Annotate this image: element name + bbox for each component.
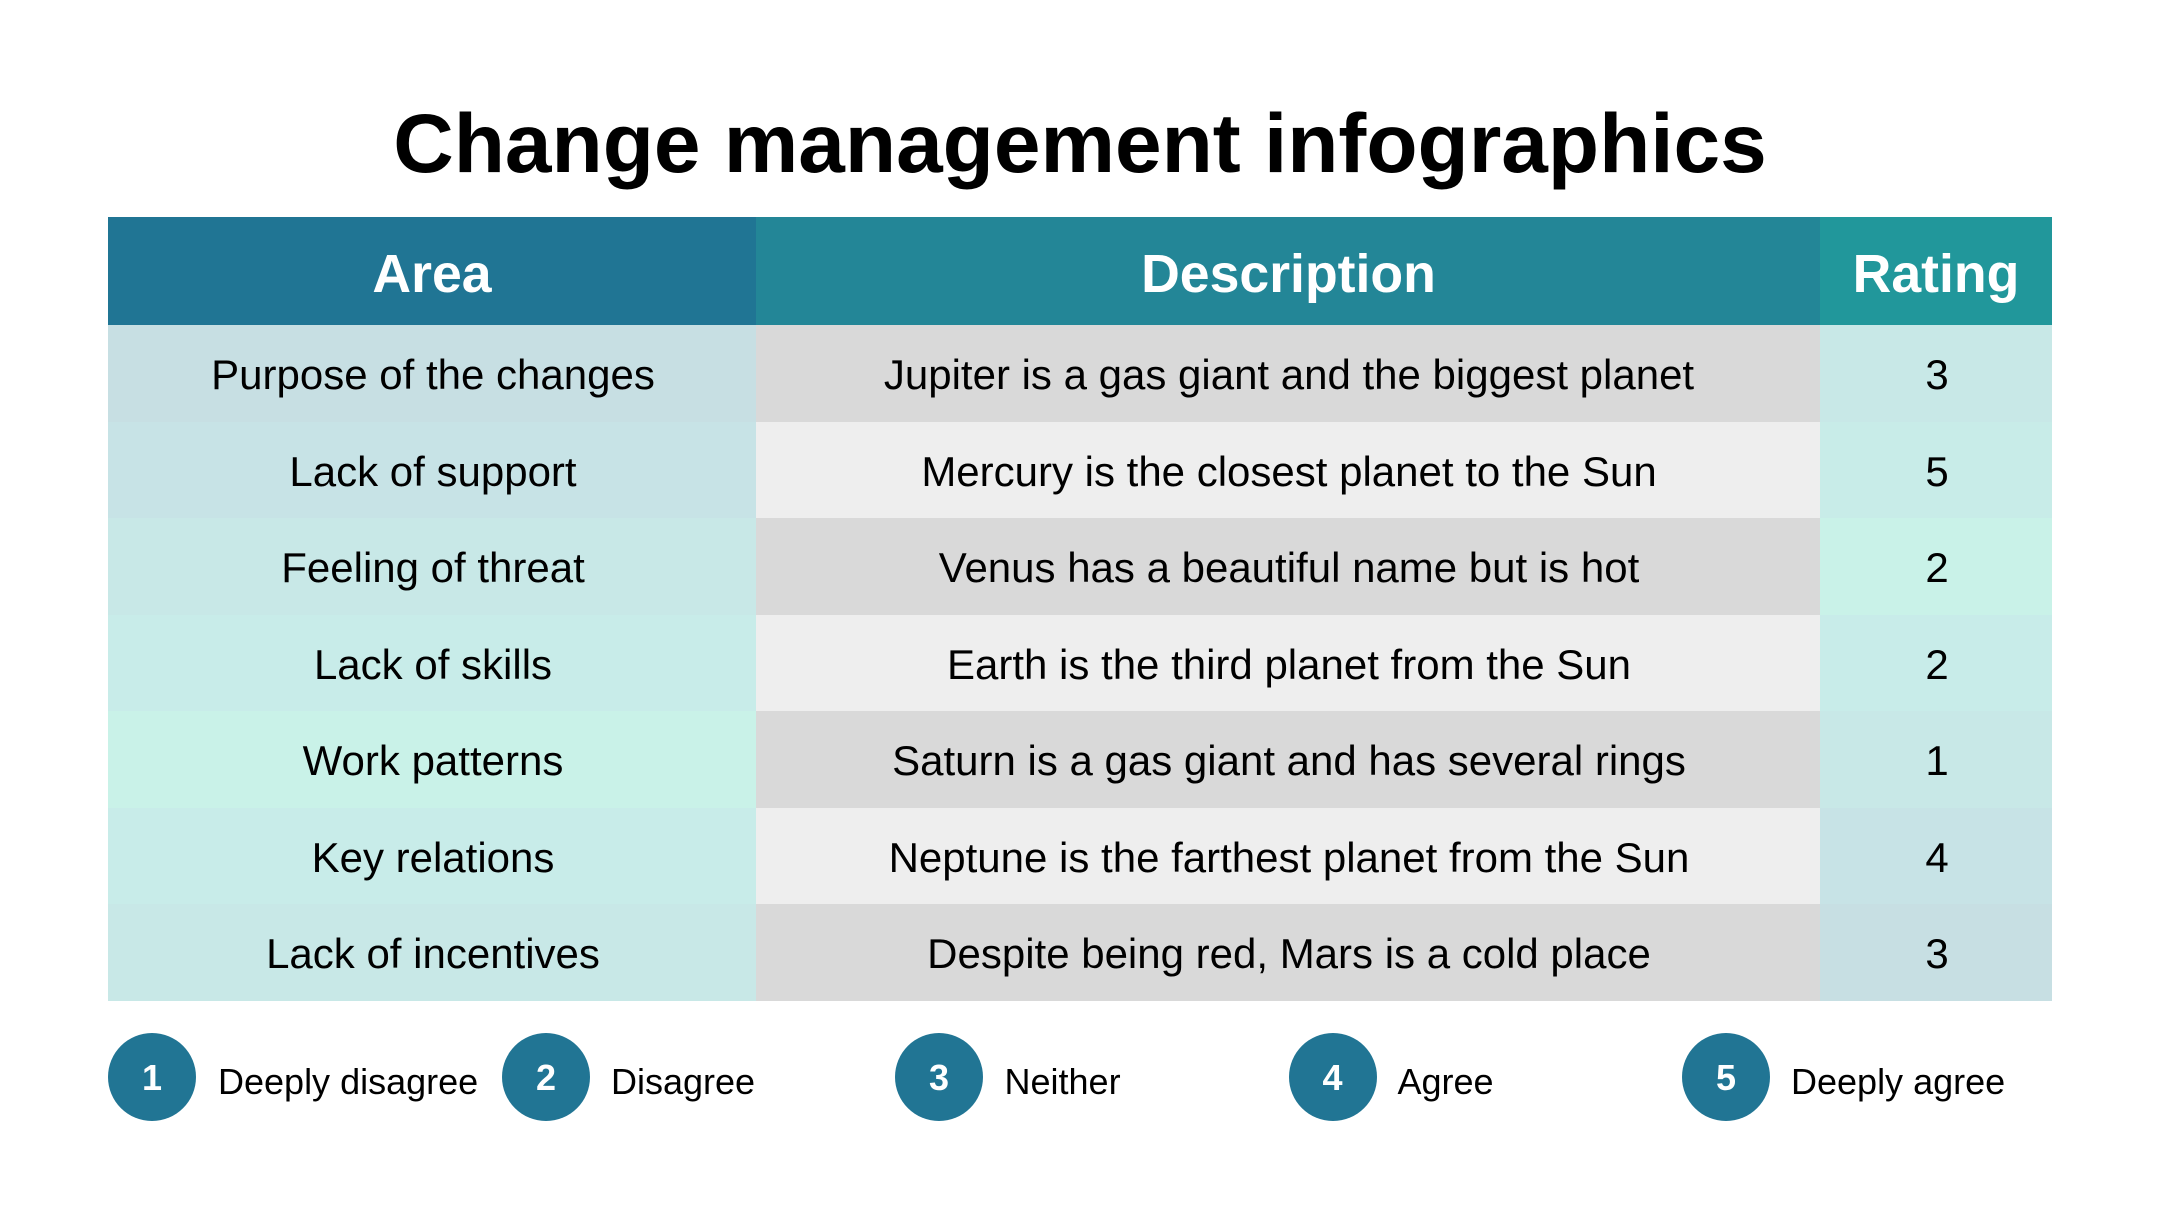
legend label 2: Disagree — [611, 1061, 755, 1102]
row 4 area — [108, 614, 756, 712]
legend badge 4 — [1288, 1033, 1376, 1121]
row 3 description — [756, 518, 1820, 615]
row 1 description — [756, 325, 1820, 422]
header: Rating — [1820, 217, 2052, 325]
row 1 area: Purpose of the changes — [211, 351, 655, 398]
row 5 rating — [1820, 711, 2052, 808]
row 2 rating — [1820, 422, 2052, 518]
legend badge 3 — [895, 1033, 983, 1121]
row 3 area: Feeling of threat — [281, 544, 585, 591]
row 1 rating — [1820, 325, 2052, 422]
header: Area — [108, 217, 756, 325]
header: Description — [756, 217, 1820, 325]
row 2 description — [756, 422, 1820, 518]
row 2 area: Lack of support — [289, 448, 577, 494]
row 1 rating: 3 — [1925, 351, 1949, 398]
row 6 rating — [1820, 808, 2052, 904]
row 7 area: Lack of incentives — [266, 930, 600, 977]
legend badge 5 — [1682, 1033, 1770, 1121]
legend label 1: Deeply disagree — [218, 1061, 478, 1102]
row 4 description: Earth is the third planet from the Sun — [947, 640, 1631, 688]
legend badge 3: 3 — [929, 1057, 949, 1098]
row 3 description: Venus has a beautiful name but is hot — [939, 544, 1639, 591]
legend badge 2 — [502, 1033, 590, 1121]
row 3 rating: 2 — [1925, 544, 1949, 591]
legend badge 5: 5 — [1716, 1057, 1736, 1098]
row 7 description: Despite being red, Mars is a cold place — [927, 930, 1651, 977]
row 5 description: Saturn is a gas giant and has several rings — [892, 737, 1686, 784]
row 3 area — [108, 518, 756, 615]
legend — [108, 1033, 2005, 1121]
row 7 rating: 3 — [1925, 930, 1949, 977]
legend label 5: Deeply agree — [1791, 1061, 2005, 1102]
row 1 area — [108, 325, 756, 422]
row 7 rating — [1820, 904, 2052, 1001]
row 6 rating: 4 — [1925, 834, 1949, 880]
row 1 description: Jupiter is a gas giant and the biggest planet — [884, 351, 1694, 398]
row 6 description: Neptune is the farthest planet from the Sun — [889, 834, 1689, 880]
title: Change management infographics — [393, 96, 1767, 190]
legend badge 4: 4 — [1322, 1057, 1343, 1098]
legend badge 2: 2 — [536, 1057, 556, 1098]
row 4 rating — [1820, 614, 2052, 712]
legend badge 1 — [108, 1033, 196, 1121]
legend badge 1: 1 — [142, 1057, 162, 1098]
header: Rating: Rating — [1853, 244, 2019, 304]
row 2 area — [108, 422, 756, 518]
row 6 area: Key relations — [312, 834, 554, 880]
row 5 area: Work patterns — [303, 737, 563, 784]
row 2 rating: 5 — [1925, 448, 1949, 494]
row 6 area — [108, 808, 756, 904]
row 7 area — [108, 904, 756, 1001]
row 2 description: Mercury is the closest planet to the Sun — [921, 448, 1657, 494]
row 6 description — [756, 808, 1820, 904]
header: Area: Area — [372, 244, 492, 304]
row 4 area: Lack of skills — [314, 640, 552, 688]
row 5 rating: 1 — [1925, 737, 1949, 784]
row 3 rating — [1820, 518, 2052, 615]
legend label 4: Agree — [1398, 1061, 1494, 1102]
header: Description: Description — [1141, 244, 1436, 304]
row 5 description — [756, 711, 1820, 808]
row 7 description — [756, 904, 1820, 1001]
row 5 area — [108, 711, 756, 808]
row 4 description — [756, 614, 1820, 712]
legend label 3: Neither — [1004, 1061, 1121, 1102]
row 4 rating: 2 — [1925, 640, 1949, 688]
